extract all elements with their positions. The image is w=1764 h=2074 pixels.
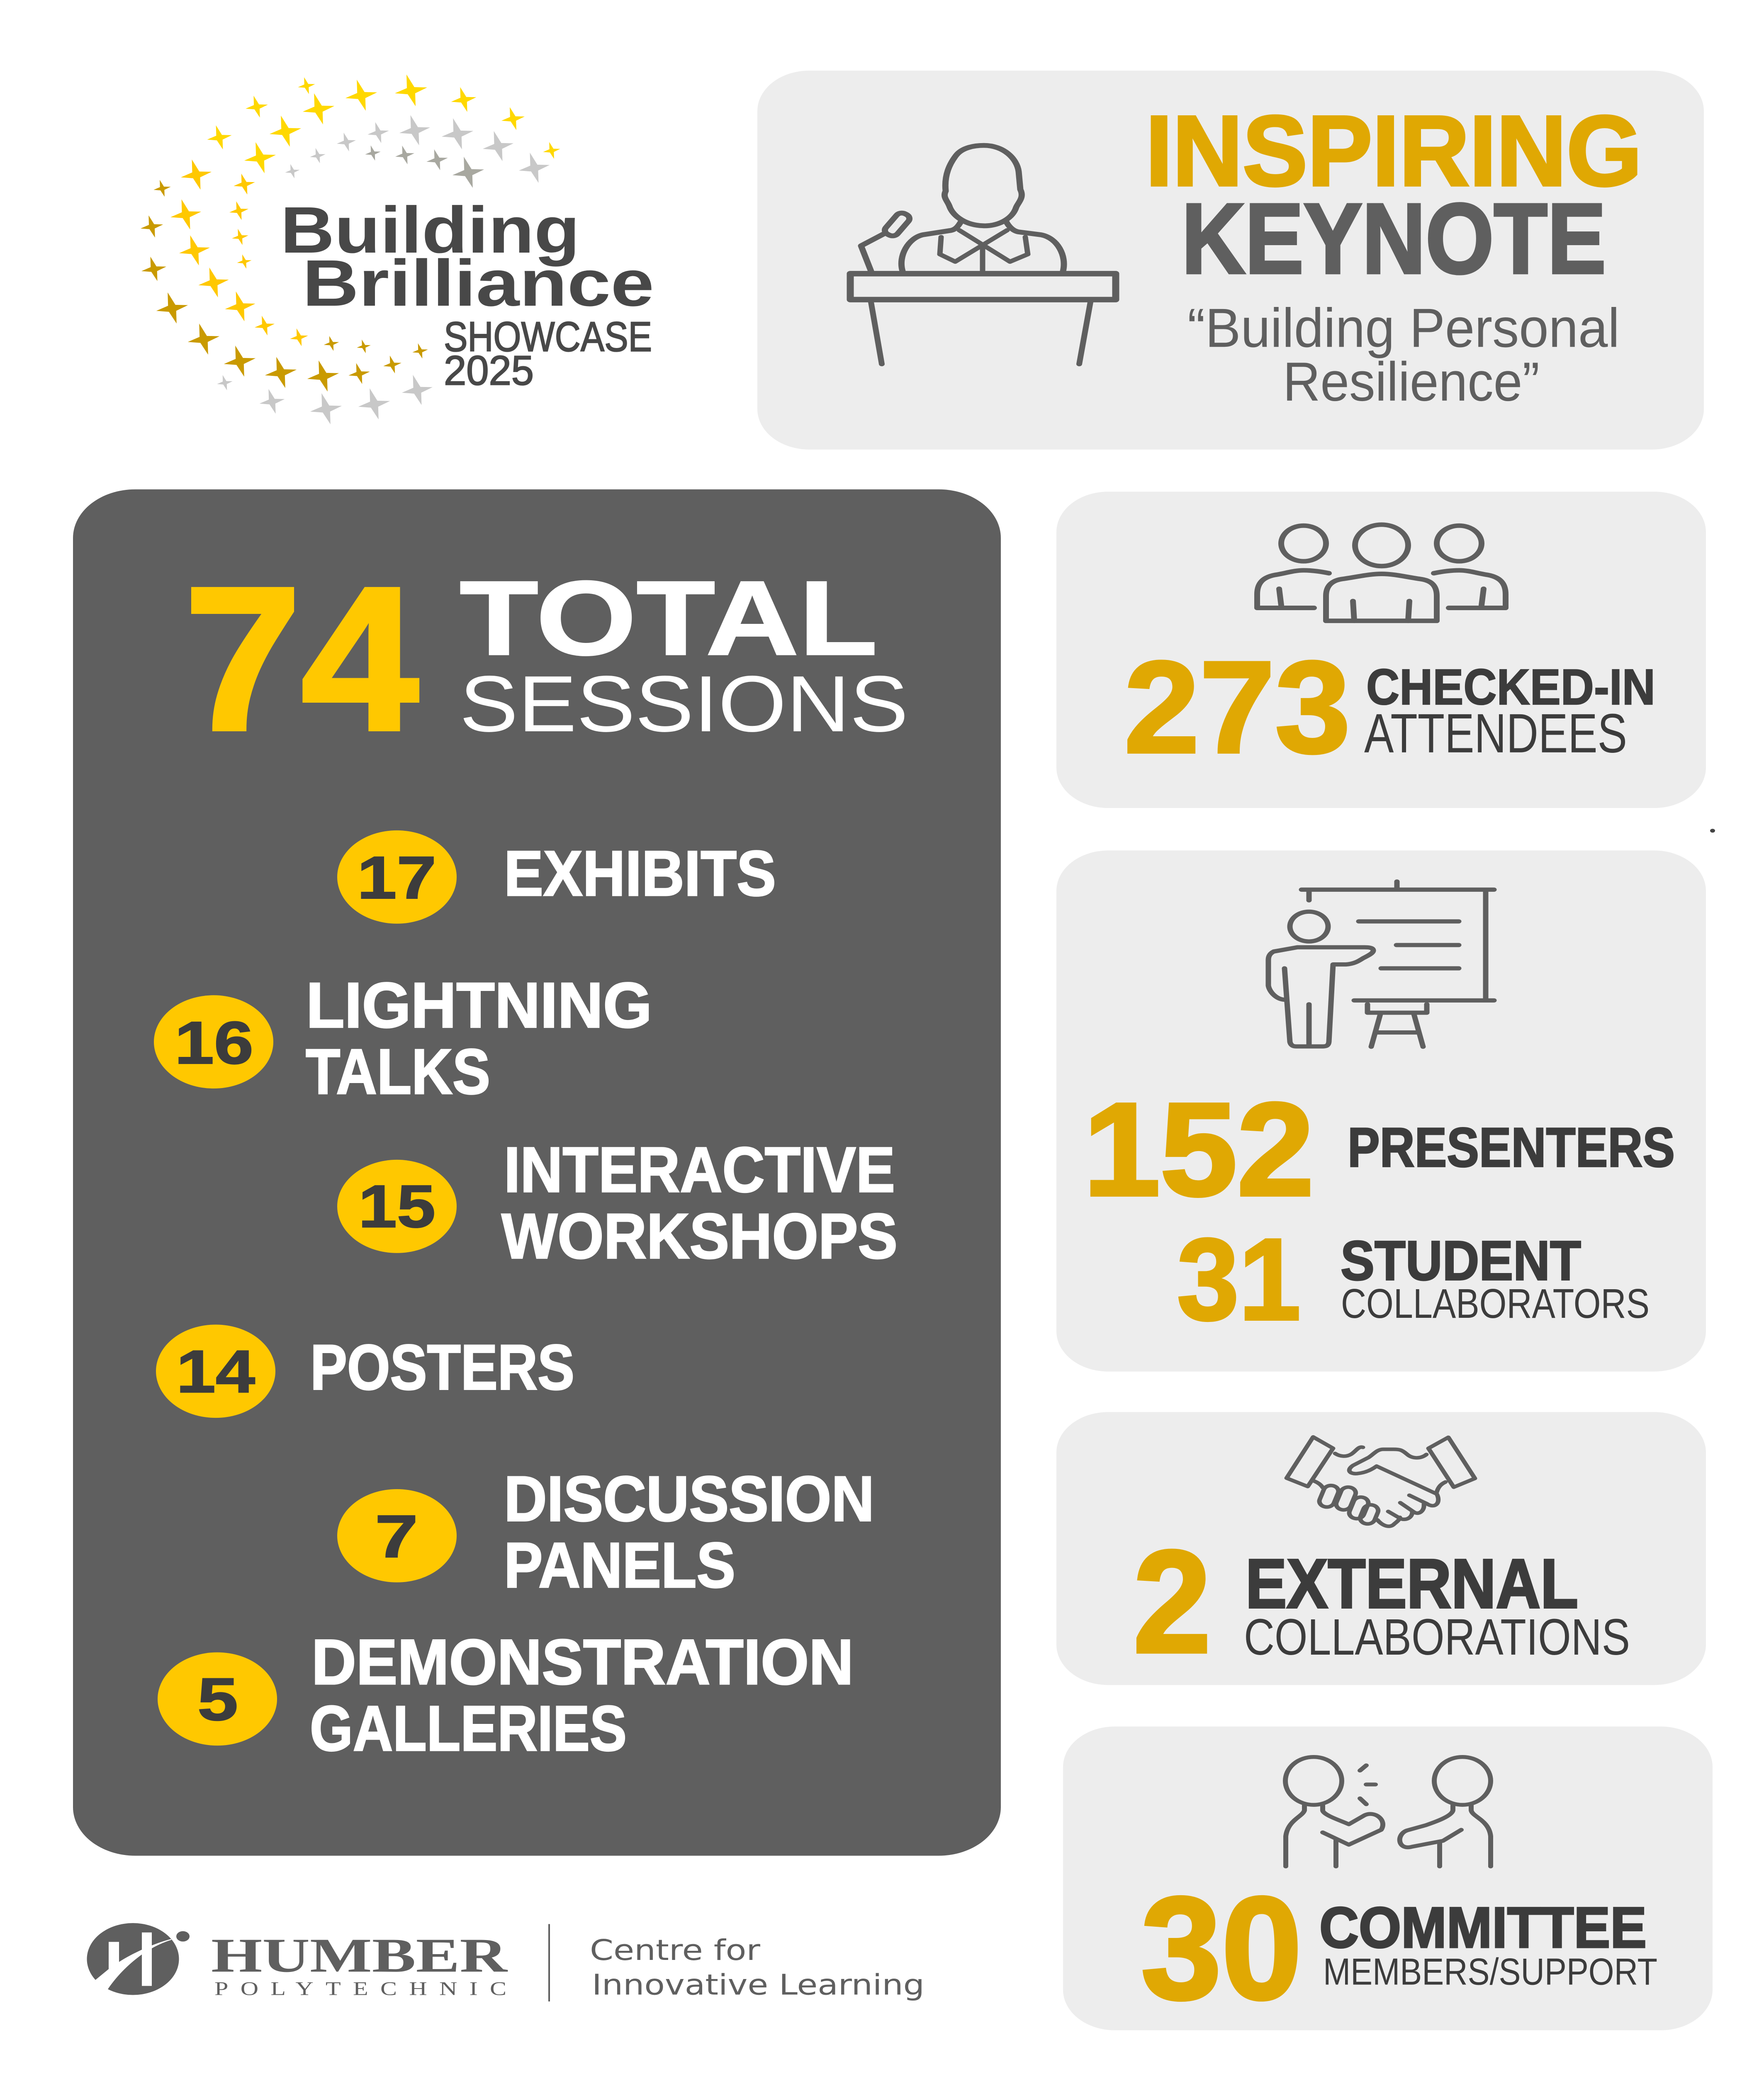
item: 16 lightning talks: 16 — [175, 1009, 253, 1076]
stat: 273 checked-in attendees: CHECKED-IN — [1366, 659, 1655, 715]
item: 14 posters — [156, 1324, 574, 1418]
item: 14 posters: 14 — [176, 1338, 255, 1405]
item: 14 posters: POSTERS — [310, 1331, 574, 1403]
footer logos — [83, 1923, 925, 2001]
stat: 273 checked-in attendees: 273 — [1124, 634, 1350, 780]
item: 5 demonstration galleries: DEMONSTRATION — [311, 1626, 854, 1698]
stat: 2 external collaborations: 2 — [1133, 1520, 1211, 1683]
item: 15 interactive workshops: 15 — [358, 1173, 436, 1240]
Humber Polytechnic wordmark: POLYTECHNIC — [214, 1978, 506, 1999]
Centre for Innovative Learning — [590, 1934, 925, 2001]
stat: 31 student collaborators: STUDENT — [1341, 1229, 1581, 1292]
stat: 2 external collaborations: EXTERNAL — [1246, 1544, 1578, 1622]
stat: 30 committee members/support: COMMITTEE — [1319, 1895, 1647, 1960]
item: 7 discussion panels: DISCUSSION — [504, 1463, 874, 1535]
stray dot — [1710, 829, 1715, 833]
stat: 30 committee members/support: 30 — [1141, 1867, 1302, 2030]
icon: presenter at whiteboard — [1268, 881, 1494, 1047]
item: 15 interactive workshops: INTERACTIVE — [504, 1134, 895, 1205]
stat: 152 presenters: 152 — [1083, 1076, 1314, 1223]
item: 16 lightning talks: TALKS — [306, 1036, 490, 1108]
heading: 74 total sessions: TOTAL — [460, 559, 878, 677]
logo: Building Brilliance Showcase 2025 — [141, 75, 654, 424]
item: 16 lightning talks — [154, 969, 652, 1108]
Humber Polytechnic wordmark: HUMBER — [211, 1929, 508, 1982]
stat: 31 student collaborators: 31 — [1177, 1215, 1301, 1344]
heading: 74 total sessions: 74 — [184, 545, 420, 773]
heading: 74 total sessions — [184, 545, 908, 773]
item: 7 discussion panels — [337, 1463, 874, 1601]
keynote title — [1187, 297, 1620, 413]
item: 16 lightning talks: LIGHTNING — [306, 969, 652, 1041]
item: 7 discussion panels: 7 — [375, 1503, 418, 1570]
panel: presenters — [1056, 850, 1706, 1372]
panel: external collaborations — [1056, 1412, 1706, 1685]
Centre for Innovative Learning: Innovative Learning — [592, 1968, 925, 2001]
stat: 152 presenters — [1083, 1076, 1675, 1223]
keynote title: Resilience” — [1283, 351, 1540, 413]
panel: attendees — [1056, 492, 1706, 808]
item: 15 interactive workshops: WORKSHOPS — [501, 1200, 898, 1272]
stat: 31 student collaborators — [1177, 1215, 1650, 1344]
item: 17 exhibits: EXHIBITS — [504, 837, 776, 909]
icon: three people — [1257, 525, 1506, 621]
stat: 30 committee members/support — [1141, 1867, 1657, 2030]
item: 5 demonstration galleries: 5 — [197, 1666, 238, 1733]
item: 15 interactive workshops — [337, 1134, 898, 1272]
stat: 2 external collaborations — [1133, 1520, 1630, 1683]
stat: 273 checked-in attendees — [1124, 634, 1655, 780]
Centre for Innovative Learning: Centre for — [590, 1934, 761, 1967]
item: 5 demonstration galleries: GALLERIES — [310, 1692, 627, 1764]
panel: inspiring keynote — [757, 71, 1704, 450]
heading: inspiring keynote — [1146, 95, 1642, 295]
panel: committee members — [1063, 1726, 1713, 2030]
logo wordmark: Brilliance — [302, 246, 654, 320]
logo wordmark: Building — [280, 193, 580, 267]
icon: speaker at podium — [850, 146, 1116, 364]
star burst — [141, 75, 560, 424]
panel: total sessions — [73, 489, 1001, 1856]
icon: Humber emblem — [83, 1923, 190, 1998]
logo wordmark — [280, 193, 654, 394]
keynote title: “Building Personal — [1187, 297, 1620, 359]
heading: 74 total sessions: SESSIONS — [460, 659, 908, 748]
item: 7 discussion panels: PANELS — [504, 1529, 735, 1601]
logo wordmark: SHOWCASE — [444, 313, 652, 360]
icon: handshake — [1287, 1437, 1475, 1526]
item: 17 exhibits: 17 — [357, 844, 436, 911]
logo wordmark: 2025 — [444, 348, 534, 394]
icon: two people talking — [1285, 1757, 1491, 1867]
item: 5 demonstration galleries — [158, 1626, 854, 1764]
item: 17 exhibits — [337, 830, 776, 924]
